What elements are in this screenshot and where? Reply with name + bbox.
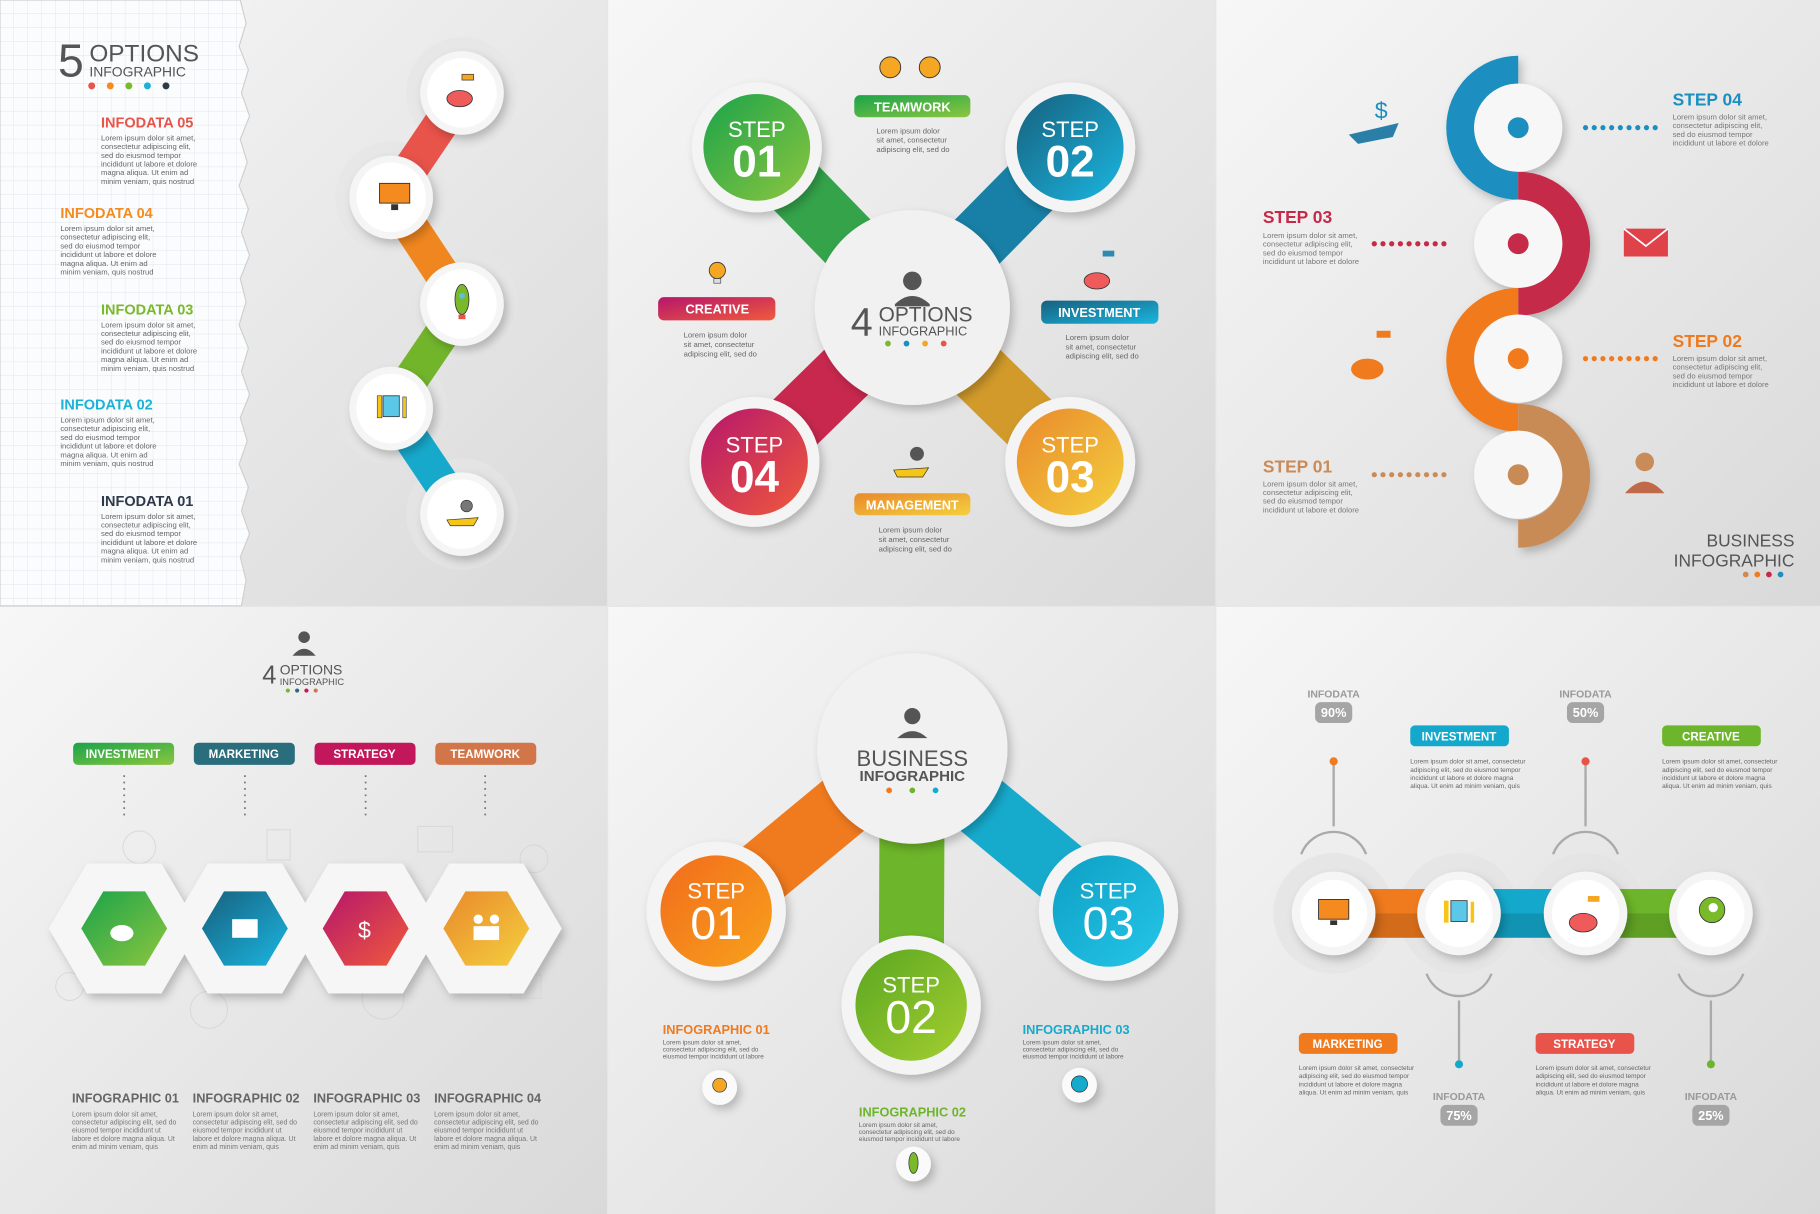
text blocks: infographic 01-04: enim ad minim veniam, quis	[313, 1144, 400, 1151]
labels and text: incididunt ut labore et dolore magna	[1662, 775, 1766, 782]
icon: piggy	[447, 74, 474, 107]
labels row: TEAMWORK	[450, 748, 521, 761]
text block: step 02: consectetur adipiscing elit,	[1673, 363, 1762, 372]
title: 5 options: OPTIONS	[89, 41, 199, 68]
labels and text: STRATEGY	[1553, 1038, 1616, 1051]
text block: step 01: sed do eiusmod tempor	[1263, 497, 1343, 506]
step 03	[1053, 855, 1164, 967]
step 02: STEP	[1041, 117, 1099, 142]
text block: infodata 03: sed do eiusmod tempor	[101, 338, 181, 347]
text block: step 02: Lorem ipsum dolor sit amet,	[1673, 354, 1767, 363]
label: investment: adipiscing elit, sed do	[1066, 352, 1139, 361]
text block: infographic 01: Lorem ipsum dolor sit amet,	[663, 1040, 742, 1047]
text block: infographic 03: consectetur adipiscing elit, sed do	[1023, 1047, 1119, 1054]
label: management: MANAGEMENT	[866, 498, 959, 513]
center hub	[817, 653, 1008, 844]
text block: step 01: incididunt ut labore et dolore	[1263, 505, 1359, 514]
text block: infographic 02: Lorem ipsum dolor sit amet,	[859, 1122, 938, 1129]
step 02	[1017, 94, 1124, 201]
text block: step 04	[1673, 90, 1769, 148]
text block: infodata 02	[60, 398, 157, 468]
labels and text: aliqua. Ut enim ad minim veniam, quis	[1662, 783, 1772, 790]
step circles	[689, 82, 1135, 527]
step 03: 03	[1083, 897, 1134, 949]
text block: infographic 03: Lorem ipsum dolor sit amet,	[1023, 1040, 1101, 1047]
label: management: sit amet, consectetur	[879, 535, 950, 544]
icon: teamwork heads	[880, 57, 940, 78]
dotted connectors	[1374, 128, 1660, 475]
infodata badges: 50%	[1573, 705, 1598, 720]
labels and text: incididunt ut labore et dolore magna	[1410, 775, 1514, 782]
panel: business infographic 3 steps	[608, 607, 1215, 1214]
label: teamwork: sit amet, consectetur	[876, 136, 947, 145]
text block: step 02: sed do eiusmod tempor	[1673, 371, 1753, 380]
center hub: 4	[851, 300, 873, 344]
label: teamwork: TEAMWORK	[874, 99, 951, 114]
text blocks: infographic 01-04: Lorem ipsum dolor sit amet,	[434, 1112, 520, 1119]
title: 5 options: INFOGRAPHIC	[89, 64, 186, 80]
labels and text: Lorem ipsum dolor sit amet, consectetur	[1662, 759, 1778, 766]
text block: infodata 01: INFODATA 01	[101, 494, 193, 510]
label: teamwork	[854, 95, 970, 154]
text block: infodata 03: minim veniam, quis nostrud	[101, 364, 194, 373]
text block: infodata 05: minim veniam, quis nostrud	[101, 177, 194, 186]
text block: infodata 04: incididunt ut labore et dolore	[60, 250, 157, 259]
label: creative: CREATIVE	[686, 301, 749, 316]
step circles	[647, 841, 1178, 1075]
label: teamwork: adipiscing elit, sed do	[876, 145, 950, 154]
text block: infodata 01: sed do eiusmod tempor	[101, 529, 181, 538]
text block: infographic 03: INFOGRAPHIC 03	[1023, 1022, 1130, 1037]
text block: step 03: consectetur adipiscing elit,	[1263, 240, 1353, 249]
connectors	[716, 749, 1108, 1005]
infodata badges: INFODATA	[1559, 690, 1612, 701]
label: creative: adipiscing elit, sed do	[684, 349, 757, 358]
text block: step 03: Lorem ipsum dolor sit amet,	[1263, 231, 1357, 240]
text block: infodata 05	[101, 116, 197, 186]
text block: infographic 02: eiusmod tempor incididunt ut labore	[859, 1136, 960, 1143]
text block: infodata 05: magna aliqua. Ut enim ad	[101, 168, 188, 177]
step 03: STEP	[1041, 433, 1099, 458]
text blocks: infographic 01-04: eiusmod tempor incididunt ut	[434, 1128, 523, 1135]
icon: monitor	[1319, 899, 1349, 925]
text block: infodata 05: INFODATA 05	[101, 116, 193, 132]
text block: step 01: Lorem ipsum dolor sit amet,	[1263, 479, 1357, 488]
labels row	[73, 743, 536, 765]
text blocks: infographic 01-04: consectetur adipiscing elit, sed do	[313, 1120, 418, 1127]
infodata badges: 90%	[1321, 705, 1346, 720]
text block: step 01: consectetur adipiscing elit,	[1263, 488, 1353, 497]
step 02: 02	[885, 991, 937, 1043]
title: 5 options	[58, 35, 199, 89]
infodata badges: INFODATA	[1433, 1092, 1486, 1103]
step 01: STEP	[728, 117, 786, 142]
center hub	[815, 210, 1010, 405]
icon: hand gear	[894, 447, 929, 477]
label: creative	[658, 297, 775, 358]
text block: infodata 02: consectetur adipiscing elit,	[60, 424, 150, 433]
label: management	[854, 493, 970, 553]
label: management: Lorem ipsum dolor	[879, 526, 943, 535]
step 01	[703, 94, 810, 201]
labels and text: aliqua. Ut enim ad minim veniam, quis	[1299, 1089, 1409, 1096]
text blocks: infographic 01-04: enim ad minim veniam, quis	[193, 1144, 279, 1151]
infodata badges	[1307, 690, 1738, 1126]
labels and text: incididunt ut labore et dolore magna	[1299, 1081, 1402, 1088]
text block: step 02: STEP 02	[1673, 331, 1742, 351]
step 01: 01	[690, 897, 742, 949]
panel: horizontal timeline	[1216, 607, 1820, 1214]
text blocks: infographic 01-04: eiusmod tempor incididunt ut	[72, 1128, 161, 1135]
text block: step 02: incididunt ut labore et dolore	[1673, 380, 1769, 389]
icon: notes	[1444, 901, 1474, 923]
text block: infographic 01: INFOGRAPHIC 01	[663, 1022, 770, 1037]
text blocks: infographic 01-04: eiusmod tempor incididunt ut	[313, 1128, 402, 1135]
text blocks: infographic 01-04: consectetur adipiscing elit, sed do	[434, 1120, 539, 1127]
icon: rocket	[455, 284, 469, 319]
text block: step 04: consectetur adipiscing elit,	[1673, 121, 1762, 130]
text block: infodata 05: Lorem ipsum dolor sit amet,	[101, 133, 195, 142]
title: business infographic	[1674, 531, 1794, 577]
icon: envelope	[1624, 229, 1668, 256]
text blocks: infographic 01-04: labore et dolore magna aliqua. Ut	[193, 1136, 296, 1143]
snake rings	[1446, 56, 1590, 548]
step 01: 01	[732, 137, 781, 186]
text blocks: infographic 01-04: enim ad minim veniam, quis	[72, 1144, 159, 1151]
doodle background	[56, 826, 548, 1028]
text block: step 04: incididunt ut labore et dolore	[1673, 139, 1769, 148]
icon: piggy	[1351, 331, 1391, 380]
infodata badges: INFODATA	[1685, 1092, 1738, 1103]
text block: infographic 02	[859, 1105, 966, 1143]
panel: snake steps	[1216, 0, 1820, 606]
text block: infodata 01: minim veniam, quis nostrud	[101, 555, 194, 564]
icon: head gear	[1699, 897, 1725, 923]
panel: 4 options steps	[608, 0, 1215, 606]
text block: infodata 01: Lorem ipsum dolor sit amet,	[101, 512, 195, 521]
text blocks: infographic 01-04: consectetur adipiscing elit, sed do	[193, 1120, 297, 1127]
step 04: STEP	[726, 433, 783, 458]
text block: infodata 02: INFODATA 02	[60, 398, 153, 414]
labels and text: adipiscing elit, sed do eiusmod tempor	[1299, 1073, 1410, 1080]
text block: infographic 01: eiusmod tempor incididunt ut labore	[663, 1053, 764, 1060]
text blocks: infographic 01-04: Lorem ipsum dolor sit amet,	[193, 1112, 279, 1119]
title: 4 options small: OPTIONS	[280, 661, 342, 677]
icon: dollar hand	[1349, 97, 1399, 144]
labels and text: Lorem ipsum dolor sit amet, consectetur	[1536, 1065, 1652, 1072]
text block: infodata 05: sed do eiusmod tempor	[101, 151, 181, 160]
label: creative: Lorem ipsum dolor	[684, 331, 748, 340]
center hub: INFOGRAPHIC	[860, 768, 965, 785]
title: business infographic: BUSINESS	[1707, 531, 1794, 551]
text blocks: infographic 01-04: enim ad minim veniam, quis	[434, 1144, 521, 1151]
text block: step 04: Lorem ipsum dolor sit amet,	[1673, 113, 1767, 122]
timeline band	[1273, 853, 1771, 974]
infodata badges: 75%	[1446, 1108, 1472, 1123]
text block: infodata 04: magna aliqua. Ut enim ad	[60, 259, 148, 268]
zigzag chain	[335, 37, 518, 570]
labels and text: Lorem ipsum dolor sit amet, consectetur	[1410, 759, 1526, 766]
text block: infographic 02: INFOGRAPHIC 02	[859, 1105, 966, 1120]
text block: infographic 03	[1023, 1022, 1130, 1060]
text blocks: infographic 01-04: labore et dolore magna aliqua. Ut	[72, 1136, 175, 1143]
text block: infographic 01: consectetur adipiscing elit, sed do	[663, 1047, 759, 1054]
text block: infodata 04: sed do eiusmod tempor	[60, 241, 141, 250]
text block: infodata 03: consectetur adipiscing elit,	[101, 329, 191, 338]
icon: hand gear	[447, 500, 478, 526]
step 01: STEP	[687, 878, 745, 903]
labels and text: aliqua. Ut enim ad minim veniam, quis	[1410, 783, 1521, 790]
text block: infographic 01	[663, 1022, 770, 1060]
labels and text: Lorem ipsum dolor sit amet, consectetur	[1299, 1065, 1415, 1072]
text blocks: infographic 01-04: labore et dolore magna aliqua. Ut	[434, 1136, 537, 1143]
arcs and stems	[1301, 763, 1743, 1064]
icon: monitor	[380, 183, 410, 210]
labels and text: incididunt ut labore et dolore magna	[1536, 1081, 1639, 1088]
step 03: STEP	[1080, 878, 1137, 903]
text block: step 03: incididunt ut labore et dolore	[1263, 257, 1359, 266]
text block: step 02	[1673, 331, 1769, 389]
labels and text: MARKETING	[1312, 1038, 1383, 1051]
step 04	[701, 409, 808, 515]
labels and text: adipiscing elit, sed do eiusmod tempor	[1410, 767, 1521, 774]
text block: infodata 04: INFODATA 04	[60, 206, 153, 222]
step 02	[855, 949, 967, 1061]
text block: infodata 02: incididunt ut labore et dolore	[60, 442, 157, 451]
title: 5 options: 5	[58, 35, 84, 87]
labels and text: adipiscing elit, sed do eiusmod tempor	[1536, 1073, 1647, 1080]
text block: infodata 01: incididunt ut labore et dolore	[101, 538, 197, 547]
torn paper	[0, 0, 250, 606]
text blocks: infographic 01-04: INFOGRAPHIC 04	[434, 1091, 542, 1106]
text block: infodata 04	[60, 206, 157, 276]
text blocks: infographic 01-04: Lorem ipsum dolor sit amet,	[313, 1112, 399, 1119]
text block: infographic 03: eiusmod tempor incididunt ut labore	[1023, 1053, 1124, 1060]
labels row: INVESTMENT	[86, 748, 160, 761]
icon: piggy	[1569, 896, 1599, 932]
text block: step 01: STEP 01	[1263, 456, 1332, 476]
text block: infodata 02: minim veniam, quis nostrud	[60, 459, 154, 468]
labels row: MARKETING	[209, 748, 279, 761]
label: investment	[1041, 301, 1158, 361]
title: business infographic: INFOGRAPHIC	[1674, 550, 1794, 570]
center hub: BUSINESS	[857, 746, 968, 771]
text block: infodata 05: incididunt ut labore et dolore	[101, 160, 197, 169]
text block: infodata 03: incididunt ut labore et dolore	[101, 346, 197, 355]
text blocks: infographic 01-04: INFOGRAPHIC 02	[193, 1091, 300, 1106]
text block: step 03	[1263, 207, 1359, 266]
text blocks: infographic 01-04: consectetur adipiscing elit, sed do	[72, 1120, 176, 1127]
step 02: 02	[1046, 137, 1095, 186]
text blocks: infographic 01-04: INFOGRAPHIC 03	[313, 1091, 420, 1106]
labels and text: INVESTMENT	[1422, 730, 1496, 743]
text block: step 03: STEP 03	[1263, 207, 1332, 227]
text block: infodata 01	[101, 494, 197, 564]
icons: small badges	[702, 1068, 1097, 1182]
hexagons	[49, 863, 562, 993]
label: management: adipiscing elit, sed do	[879, 544, 952, 553]
label: creative: sit amet, consectetur	[684, 340, 755, 349]
center hub: OPTIONS	[879, 303, 973, 326]
text block: infodata 04: minim veniam, quis nostrud	[60, 267, 154, 276]
text block: infodata 03: magna aliqua. Ut enim ad	[101, 355, 188, 364]
text blocks: infographic 01-04: Lorem ipsum dolor sit amet,	[72, 1112, 158, 1119]
step 04: 04	[730, 453, 779, 502]
icon: bulb	[709, 262, 725, 283]
step 03	[1017, 409, 1124, 515]
panel: 5 options infographic	[0, 0, 607, 606]
infodata badges: 25%	[1698, 1108, 1724, 1123]
icon: notes	[377, 396, 406, 418]
title: 4 options small: INFOGRAPHIC	[280, 677, 344, 687]
text block: infodata 05: consectetur adipiscing elit,	[101, 142, 191, 151]
text block: infodata 01: magna aliqua. Ut enim ad	[101, 547, 188, 556]
icon: piggy investment	[1084, 251, 1114, 289]
text block: step 04: STEP 04	[1673, 90, 1742, 110]
title: 4 options small: 4	[262, 662, 277, 690]
text block: step 03: sed do eiusmod tempor	[1263, 248, 1343, 257]
text block: infodata 03: Lorem ipsum dolor sit amet,	[101, 320, 195, 329]
text block: infodata 02: sed do eiusmod tempor	[60, 433, 141, 442]
label: investment: Lorem ipsum dolor	[1066, 333, 1129, 342]
center hub: INFOGRAPHIC	[879, 323, 967, 338]
text block: step 01	[1263, 456, 1359, 514]
text block: infodata 04: Lorem ipsum dolor sit amet,	[60, 224, 155, 233]
connectors	[754, 147, 1070, 462]
label: investment: INVESTMENT	[1058, 305, 1140, 320]
infodata badges: INFODATA	[1307, 690, 1360, 701]
labels row: STRATEGY	[333, 748, 396, 761]
labels and text: CREATIVE	[1682, 730, 1740, 743]
text block: infodata 04: consectetur adipiscing elit,	[60, 233, 150, 242]
text block: infographic 02: consectetur adipiscing elit, sed do	[859, 1129, 955, 1136]
text block: infodata 03: INFODATA 03	[101, 303, 193, 319]
panel: hexagon options	[0, 607, 607, 1214]
label: teamwork: Lorem ipsum dolor	[876, 126, 940, 135]
text block: infodata 01: consectetur adipiscing elit,	[101, 520, 191, 529]
title: 4 options small	[262, 631, 344, 693]
step 01	[660, 855, 772, 967]
labels and text: adipiscing elit, sed do eiusmod tempor	[1662, 767, 1773, 774]
text block: infodata 03	[101, 303, 197, 373]
label: investment: sit amet, consectetur	[1066, 342, 1137, 351]
icon: dollar hand: $	[1375, 97, 1388, 123]
text blocks: infographic 01-04	[72, 1091, 542, 1151]
text block: infodata 02: Lorem ipsum dolor sit amet,	[60, 415, 155, 424]
text blocks: infographic 01-04: labore et dolore magna aliqua. Ut	[313, 1136, 416, 1143]
labels and text: aliqua. Ut enim ad minim veniam, quis	[1536, 1089, 1646, 1096]
icon: businessman	[1625, 453, 1664, 493]
text block: infodata 02: magna aliqua. Ut enim ad	[60, 450, 148, 459]
hexagons: $	[358, 917, 371, 943]
text blocks: infographic 01-04: eiusmod tempor incididunt ut	[193, 1128, 282, 1135]
step 03: 03	[1046, 453, 1095, 502]
step 02: STEP	[882, 972, 940, 997]
text block: step 04: sed do eiusmod tempor	[1673, 130, 1753, 139]
text blocks: infographic 01-04: INFOGRAPHIC 01	[72, 1091, 179, 1106]
labels and text	[1299, 725, 1778, 1096]
